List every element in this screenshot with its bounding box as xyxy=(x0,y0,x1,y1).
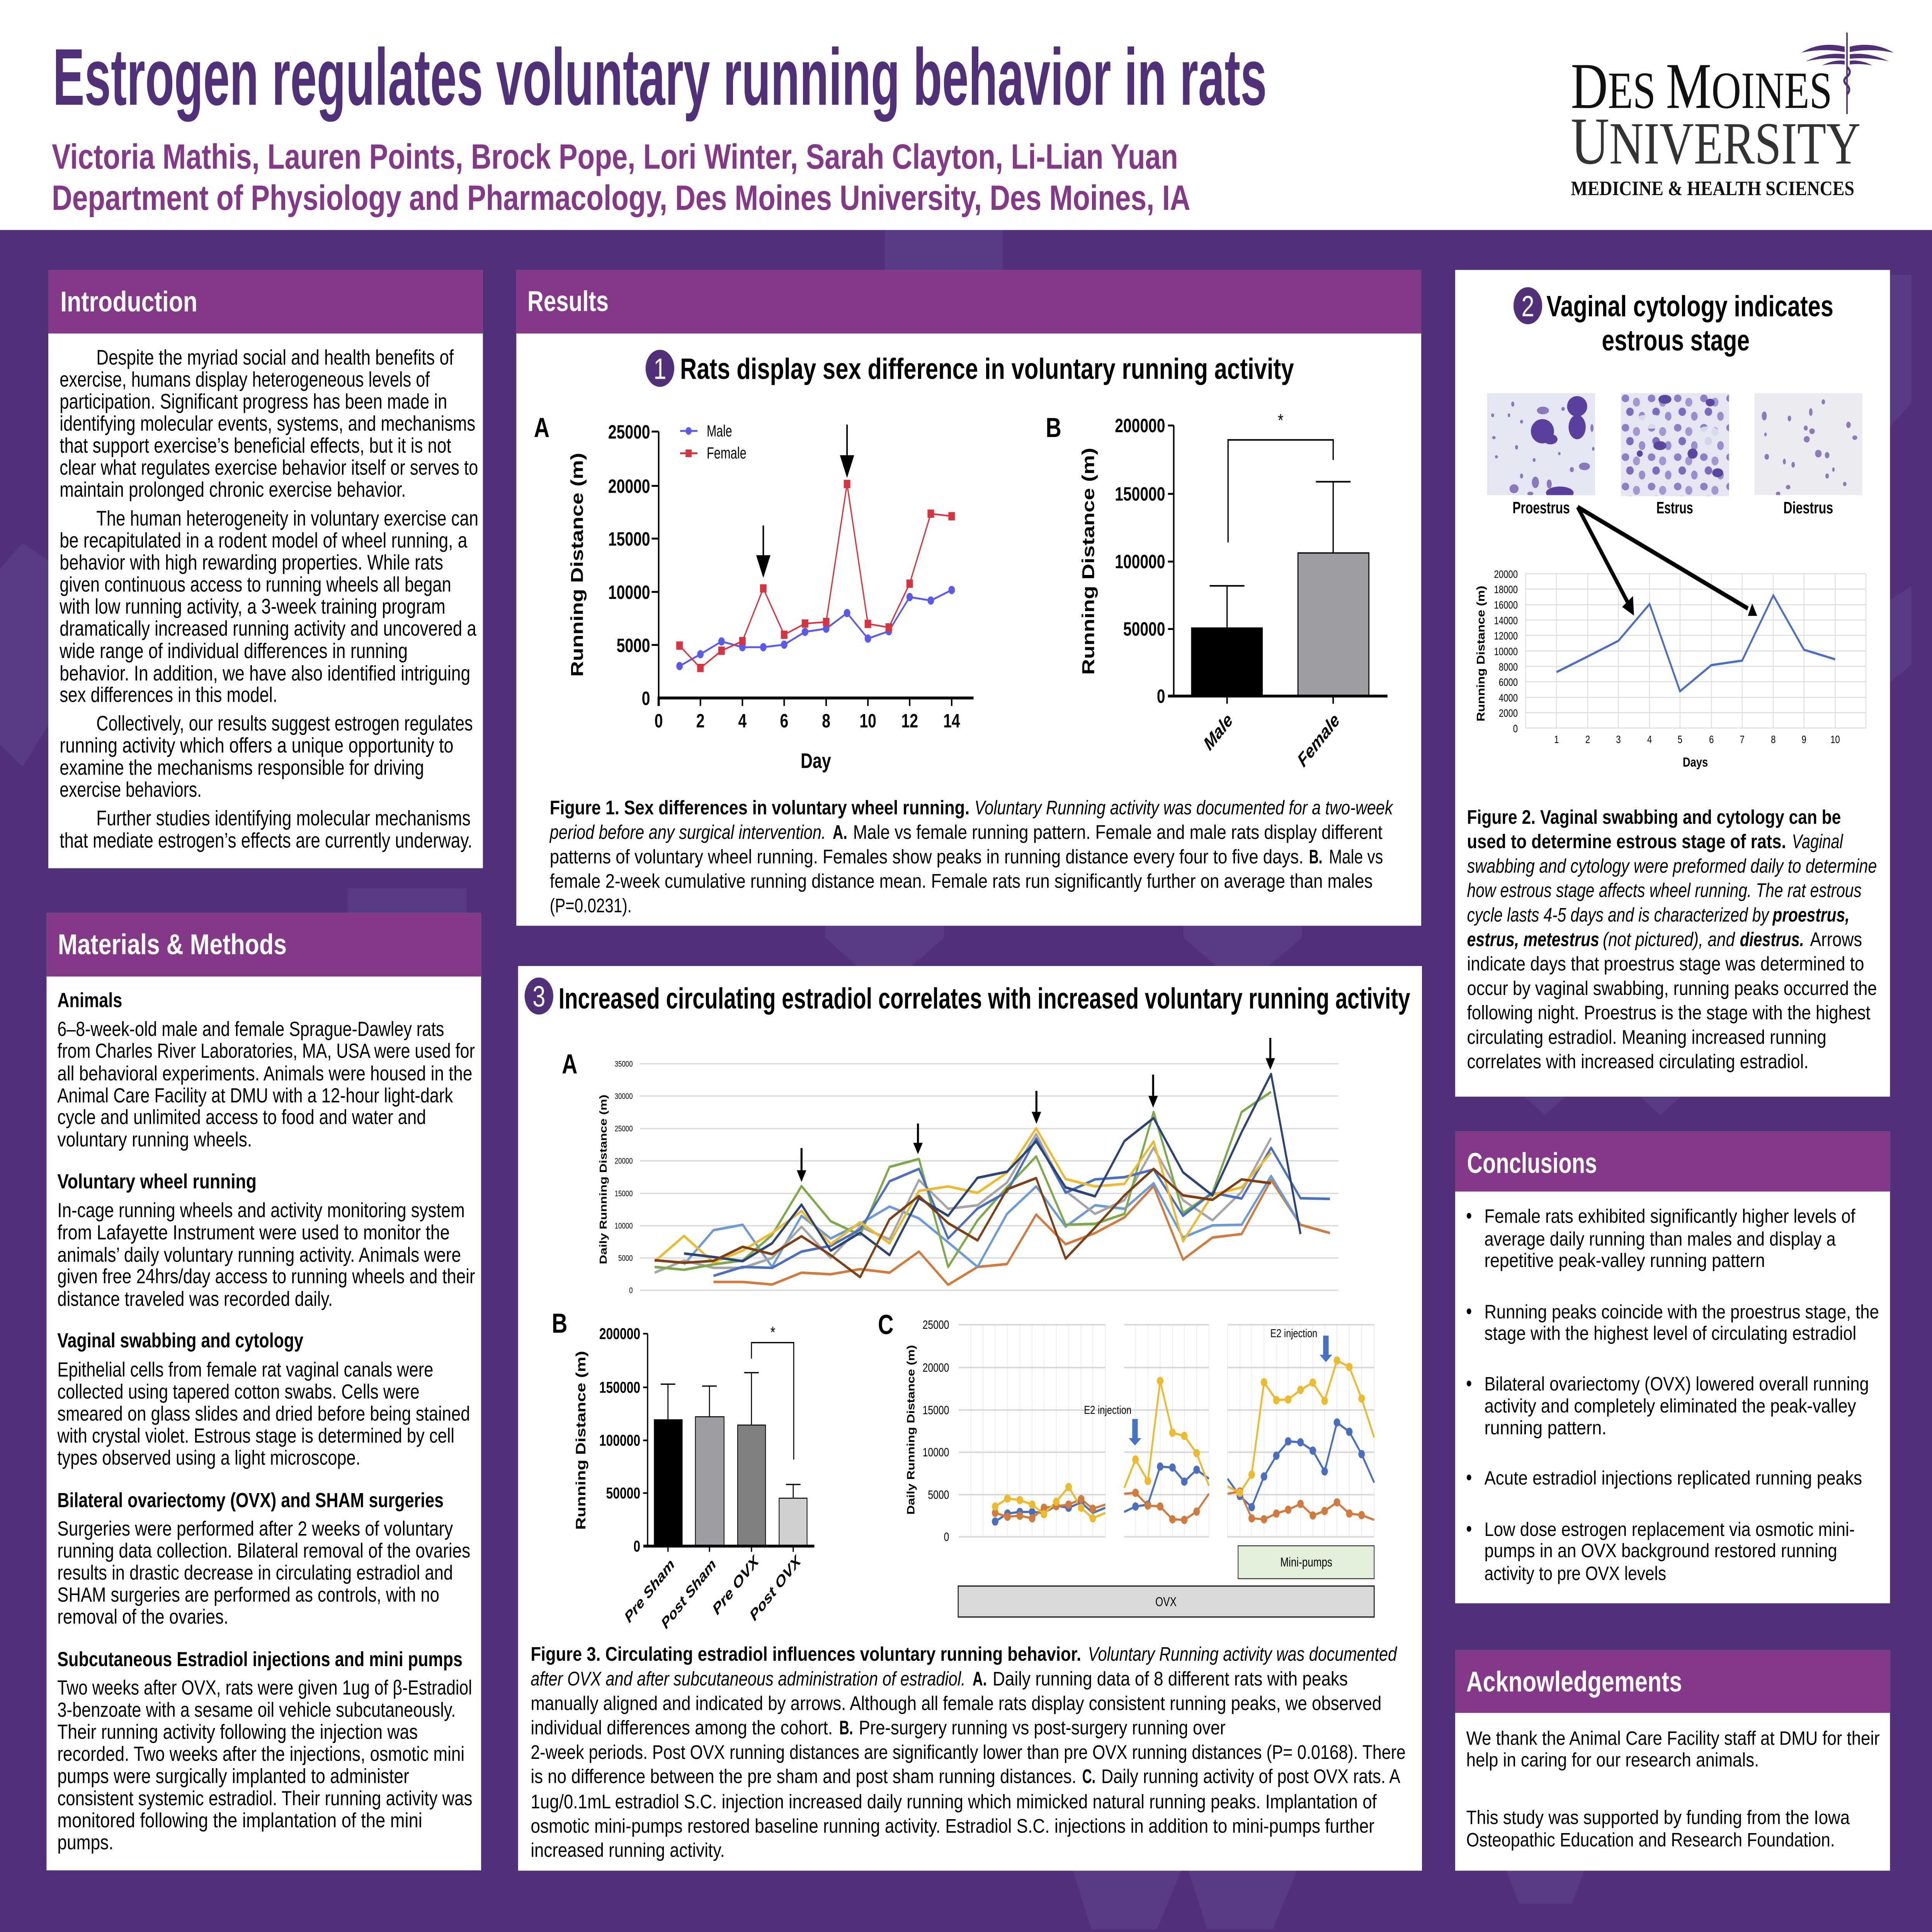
text block: voluntary wheel running: given free 24hrs/day access to running wheels and their xyxy=(57,1265,475,1288)
text block: funding xyxy=(1466,1807,1850,1851)
bar chart: figure 3B: Pre Sham xyxy=(622,1556,677,1626)
text block: introduction: given continuous access to running wheels all began xyxy=(60,573,451,596)
caption: figure 3: Voluntary Running activity was documented xyxy=(1088,1643,1397,1665)
header band xyxy=(0,0,1932,230)
text block: introduction xyxy=(59,346,478,852)
arrow: first E2 injection: E2 injection xyxy=(1084,1403,1131,1417)
bullet: sex difference: average daily running than males and display a xyxy=(1484,1229,1836,1250)
line chart: figure 3A: A xyxy=(562,1048,577,1079)
panel: finding 3 xyxy=(518,966,1422,1871)
text block: introduction: that support exercise’s beneficial effects, but it is not xyxy=(60,434,451,457)
line chart: figure 2: 8 xyxy=(1771,734,1776,746)
arrows: aligned peaks xyxy=(797,1038,1275,1182)
bullet: ovariectomy: Bilateral ovariectomy (OVX) lowered overall running xyxy=(1484,1374,1869,1395)
caption: figure 1: female 2-week cumulative running distance mean. Female rats run significantly further on average than males xyxy=(550,870,1372,892)
heading: finding 3: 3 xyxy=(532,980,545,1013)
line chart: figure 2: 5 xyxy=(1678,734,1682,746)
line chart: figure 1A: 4 xyxy=(738,711,747,732)
bar chart: figure 3B: * xyxy=(770,1323,775,1341)
caption: figure 2: Vaginal xyxy=(1792,830,1844,852)
line chart: figure 3A: 0 xyxy=(629,1286,633,1295)
text block: introduction: behavior with high rewarding properties. While rats xyxy=(60,551,443,574)
bar chart: figure 3B: 200000 xyxy=(599,1325,640,1342)
micrograph: diestrus xyxy=(1754,393,1862,495)
caption: figure 3: increased running activity. xyxy=(531,1839,725,1861)
text block: introduction: Collectively, our results suggest estrogen regulates xyxy=(96,712,473,735)
bullet: sex difference xyxy=(1467,1206,1855,1271)
line chart: figure 1A: 10000 xyxy=(608,582,650,603)
line chart: figure 1A: Day xyxy=(801,750,831,773)
text block: estradiol injections and mini pumps: Two weeks after OVX, rats were given 1ug of β-Estradiol xyxy=(57,1677,472,1699)
bar chart: figure 3B: Post Sham xyxy=(658,1556,719,1632)
caption: figure 3: is no difference between the pre sham and post sham running distances. xyxy=(531,1765,1077,1787)
line chart: figure 3C xyxy=(878,1309,1374,1617)
bar chart: figure 1B: Running Distance (m) xyxy=(1078,448,1098,675)
arrow: first E2 injection xyxy=(1084,1403,1141,1446)
caption: figure 3: 1ug/0.1mL estradiol S.C. injection increased daily running which mimicked natural running peaks. Implantation of xyxy=(531,1790,1377,1813)
line chart: figure 2: 14000 xyxy=(1494,615,1518,627)
caption: figure 1: B. xyxy=(1309,845,1322,868)
line chart: figure 1A: 10 xyxy=(859,711,876,732)
bar chart: figure 3B: 150000 xyxy=(599,1379,640,1396)
arrow: proestrus to second peak xyxy=(1578,507,1757,616)
line chart: figure 2: 12000 xyxy=(1494,630,1518,642)
caption: figure 2: diestrus. xyxy=(1740,928,1804,951)
line chart: figure 1A: 5000 xyxy=(617,635,650,656)
caption: figure 3: individual differences among the cohort. xyxy=(531,1716,833,1738)
bar chart: figure 1B: * xyxy=(1278,410,1283,430)
text block: funding: Osteopathic Education and Research Foundation. xyxy=(1466,1830,1835,1851)
text block: vaginal swabbing and cytology: smeared on glass slides and dried before being stained xyxy=(57,1403,470,1425)
line chart: figure 3A: 30000 xyxy=(615,1092,633,1101)
line chart: figure 2: Days xyxy=(1683,755,1708,770)
line chart: figure 2: 9 xyxy=(1802,734,1806,746)
line chart: figure 2: 18000 xyxy=(1494,584,1518,596)
line chart: figure 2: 10 xyxy=(1830,734,1840,746)
heading: finding 1: Rats display sex difference in voluntary running activity xyxy=(680,352,1294,385)
caption: figure 3: Daily running data of 8 different rats with peaks xyxy=(993,1667,1348,1690)
text block: estradiol injections and mini pumps: 3-benzoate with a sesame oil vehicle subcutaneously. xyxy=(57,1699,456,1721)
micrograph: estrus xyxy=(1621,393,1729,496)
caption: figure 1: Voluntary Running activity was documented for a two-week xyxy=(975,796,1393,818)
line chart: figure 2: 3 xyxy=(1616,734,1621,746)
text block: thanks: We thank the Animal Care Facility staff at DMU for their xyxy=(1466,1728,1880,1749)
text block: introduction: Despite the myriad social and health benefits of xyxy=(96,346,454,369)
text block: estradiol injections and mini pumps: Subcutaneous Estradiol injections and mini pumps xyxy=(57,1648,463,1671)
line chart: figure 3C: 15000 xyxy=(923,1403,949,1417)
text block: introduction: sex differences in this model. xyxy=(60,684,277,707)
panel: results xyxy=(516,270,1421,926)
bullet: ovariectomy: activity and completely eliminated the peak-valley xyxy=(1484,1396,1856,1417)
panel: introduction xyxy=(48,270,483,868)
label: OVX xyxy=(958,1586,1374,1617)
text block: OVX and SHAM surgeries: removal of the ovaries. xyxy=(57,1606,228,1628)
line chart: figure 1A: 0 xyxy=(642,688,650,709)
text block: funding: This study was supported by funding from the Iowa xyxy=(1466,1807,1850,1828)
line chart: figure 1A: 15000 xyxy=(608,529,650,550)
bar chart: figure 1B: 200000 xyxy=(1115,415,1165,437)
caption: figure 1: Male vs xyxy=(1329,845,1383,868)
caption: figure 2: Arrows xyxy=(1810,928,1862,951)
heading: finding 1: 1 xyxy=(653,352,667,385)
caption: figure 2: how estrous stage affects wheel running. The rat estrous xyxy=(1467,879,1862,901)
line chart: figure 2: 2 xyxy=(1585,734,1590,746)
line chart: figure 3A: 35000 xyxy=(615,1060,633,1069)
caption: figure 3: B. xyxy=(839,1716,853,1738)
line chart: figure 3C: 5000 xyxy=(928,1488,949,1502)
heading: finding 2: Vaginal cytology indicates xyxy=(1546,290,1833,323)
caption: figure 3: A. xyxy=(973,1667,987,1690)
bullet: estrogen replacement: activity to pre OVX levels xyxy=(1484,1563,1666,1584)
bullet: ovariectomy xyxy=(1467,1374,1869,1439)
caption: figure 3: Figure 3. Circulating estradiol influences voluntary running behavior. xyxy=(531,1643,1081,1665)
text block: introduction: Further studies identifying molecular mechanisms xyxy=(96,807,471,830)
text block: estradiol injections and mini pumps xyxy=(57,1648,472,1854)
text block: thanks xyxy=(1466,1728,1880,1771)
text block: introduction: exercise behaviors. xyxy=(60,778,202,801)
heading: conclusions: Conclusions xyxy=(1467,1147,1597,1179)
heading: finding 2: 2 xyxy=(1521,290,1534,323)
line chart: figure 3C: 0 xyxy=(944,1530,949,1544)
line chart: figure 3A: 10000 xyxy=(615,1221,633,1231)
caption: figure 1: A. xyxy=(833,821,847,843)
heading: introduction: Introduction xyxy=(60,286,197,318)
line chart: figure 2: 0 xyxy=(1513,723,1518,735)
line chart: figure 1A: 6 xyxy=(780,711,788,732)
bar chart: figure 1B: 0 xyxy=(1157,686,1165,707)
line chart: figure 2: 7 xyxy=(1740,734,1745,746)
caption: figure 3: C. xyxy=(1082,1765,1095,1787)
line chart: figure 1A: 2 xyxy=(696,711,705,732)
line chart: figure 3C: 20000 xyxy=(923,1361,949,1374)
line chart: figure 2: 6000 xyxy=(1499,677,1518,689)
bar chart: figure 1B xyxy=(1046,410,1388,771)
heading: materials and methods: Materials & Methods xyxy=(58,929,287,961)
bar chart: figure 3B: 50000 xyxy=(606,1484,640,1502)
icon: caduceus xyxy=(1801,32,1894,114)
caption: figure 3: Daily running activity of post OVX rats. A xyxy=(1101,1765,1400,1787)
text block: introduction: examine the mechanisms responsible for driving xyxy=(60,756,424,779)
line chart: figure 2: 16000 xyxy=(1494,599,1518,611)
line chart: figure 2: 4 xyxy=(1647,734,1652,746)
text block: introduction: exercise, humans display heterogeneous levels of xyxy=(60,368,430,391)
affiliation: Department of Physiology and Pharmacology, Des Moines University, Des Moines, IA xyxy=(52,179,1190,218)
line chart: figure 2: 20000 xyxy=(1494,568,1518,580)
text block: introduction: maintain prolonged chronic exercise behavior. xyxy=(60,478,406,502)
line chart: figure 2: 6 xyxy=(1709,734,1714,746)
text block: animals: from Charles River Laboratories, MA, USA were used for xyxy=(57,1040,475,1062)
text block: vaginal swabbing and cytology: Vaginal swabbing and cytology xyxy=(57,1329,303,1352)
bullet: sex difference: Female rats exhibited significantly higher levels of xyxy=(1484,1206,1855,1227)
caption: figure 1: Male vs female running pattern. Female and male rats display different xyxy=(853,821,1383,843)
panel: acknowledgements xyxy=(1455,1650,1890,1871)
legend: Female xyxy=(707,444,747,462)
heading: finding 3: Increased circulating estradiol correlates with increased voluntary running activity xyxy=(559,982,1410,1015)
text block: animals: all behavioral experiments. Animals were housed in the xyxy=(57,1062,472,1085)
text block: estradiol injections and mini pumps: Their running activity following the injection was xyxy=(57,1721,418,1743)
bar chart: figure 1B: B xyxy=(1046,412,1061,443)
heading: finding 2 xyxy=(1514,287,1833,357)
caption: figure 2: indicate days that proestrus stage was determined to xyxy=(1467,952,1864,975)
text block: vaginal swabbing and cytology: types observed using a light microscope. xyxy=(57,1447,361,1469)
line chart: figure 1A: 12 xyxy=(901,711,918,732)
arrow: second E2 injection: E2 injection xyxy=(1270,1327,1317,1340)
authors: Victoria Mathis, Lauren Points, Brock Pope, Lori Winter, Sarah Clayton, Li-Lian Yuan xyxy=(52,137,1178,177)
legend: Male xyxy=(707,422,732,440)
line chart: figure 1A: 25000 xyxy=(608,422,650,443)
text block: voluntary wheel running: distance traveled was recorded daily. xyxy=(57,1288,333,1311)
text block: estradiol injections and mini pumps: pumps were surgically implanted to administer xyxy=(57,1765,409,1788)
line chart: figure 2 xyxy=(1475,568,1866,770)
caption: figure 3: after OVX and after subcutaneous administration of estradiol. xyxy=(531,1667,966,1690)
text block: voluntary wheel running: from Lafayette Instrument were used to monitor the xyxy=(57,1221,450,1244)
bar chart: figure 3B: 100000 xyxy=(599,1432,640,1449)
line chart: figure 3A: 25000 xyxy=(615,1124,633,1134)
title: Estrogen regulates voluntary running behavior in rats xyxy=(53,32,1267,122)
line chart: figure 3A: 15000 xyxy=(615,1189,633,1199)
line chart: figure 2: 10000 xyxy=(1494,646,1518,658)
text block: voluntary wheel running: In-cage running wheels and activity monitoring system xyxy=(57,1199,465,1222)
text block: animals: Animal Care Facility at DMU with a 12-hour light-dark xyxy=(57,1084,453,1107)
bullet: sex difference: repetitive peak-valley running pattern xyxy=(1484,1250,1765,1271)
text block: introduction: clear what regulates exercise behavior itself or serves to xyxy=(60,456,478,480)
text block: estradiol injections and mini pumps: consistent systemic estradiol. Their running activity was xyxy=(57,1787,472,1810)
legend xyxy=(680,422,747,462)
line chart: figure 1A xyxy=(534,412,974,773)
heading: finding 2: estrous stage xyxy=(1602,324,1750,357)
text block: OVX and SHAM surgeries xyxy=(57,1489,470,1628)
line chart: figure 2: 2000 xyxy=(1499,707,1518,719)
logo: Des Moines University: DES MOINES xyxy=(1571,49,1832,122)
bullet: ovariectomy: running pattern. xyxy=(1484,1418,1607,1439)
bar chart: figure 3B: Post OVX xyxy=(747,1551,804,1624)
text block: animals: Animals xyxy=(57,989,122,1012)
line chart: figure 3C: Daily Running Distance (m) xyxy=(905,1345,917,1515)
caption: figure 3 xyxy=(531,1643,1406,1861)
text block: animals: 6–8-week-old male and female Sprague-Dawley rats xyxy=(57,1018,444,1041)
caption: figure 3: manually aligned and indicated by arrows. Although all female rats display consistent running peaks, we observed xyxy=(531,1692,1381,1714)
text block: vaginal swabbing and cytology xyxy=(57,1329,470,1469)
caption: figure 1: patterns of voluntary wheel running. Females show peaks in running distance every four to five days. xyxy=(550,845,1303,868)
line chart: figure 1A: 20000 xyxy=(608,476,650,497)
bullet: acute injections: Acute estradiol injections replicated running peaks xyxy=(1484,1468,1862,1489)
bar chart: figure 1B: Female xyxy=(1294,709,1343,771)
bar chart: figure 3B: B xyxy=(552,1308,567,1339)
text block: estradiol injections and mini pumps: recorded. Two weeks after the injections, osmotic mini xyxy=(57,1743,464,1765)
logo: Des Moines University: UNIVERSITY xyxy=(1571,104,1861,178)
caption: figure 1 xyxy=(549,796,1393,917)
caption: figure 2: estrus, metestrus xyxy=(1467,928,1599,951)
line chart: figure 1A: 0 xyxy=(655,711,663,732)
arrow: proestrus to first peak xyxy=(1578,507,1634,616)
line chart: figure 3A xyxy=(562,1038,1338,1295)
bullet: estrogen replacement xyxy=(1467,1519,1855,1584)
caption: figure 2: circulating estradiol. Meaning increased running xyxy=(1467,1026,1827,1048)
text block: OVX and SHAM surgeries: SHAM surgeries are performed as controls, with no xyxy=(57,1584,439,1606)
text block: vaginal swabbing and cytology: Epithelial cells from female rat vaginal canals were xyxy=(57,1359,433,1381)
line chart: figure 3C: 25000 xyxy=(923,1318,949,1332)
caption: figure 2: (not pictured), and xyxy=(1603,928,1735,951)
text block: introduction: participation. Significant progress has been made in xyxy=(60,390,447,413)
line chart: figure 1A: Running Distance (m) xyxy=(567,453,587,677)
logo: Des Moines University xyxy=(1571,32,1894,200)
caption: figure 1: period before any surgical intervention. xyxy=(549,821,826,843)
caption: figure 2: Figure 2. Vaginal swabbing and cytology can be xyxy=(1467,806,1841,828)
text block: voluntary wheel running: animals’ daily voluntary running activity. Animals were xyxy=(57,1244,461,1267)
panel: materials and methods xyxy=(46,913,481,1870)
labels: cycle stages: Estrus xyxy=(1656,499,1693,517)
caption: figure 2: swabbing and cytology were preformed daily to determine xyxy=(1467,855,1877,877)
line chart: figure 2: 4000 xyxy=(1499,692,1518,704)
caption: figure 2: proestrus, xyxy=(1772,903,1850,926)
text block: introduction: The human heterogeneity in voluntary exercise can xyxy=(96,507,478,530)
labels: cycle stages: Proestrus xyxy=(1512,499,1570,517)
labels: cycle stages: Diestrus xyxy=(1783,499,1833,517)
text block: introduction: behavior. In addition, we have also identified intriguing xyxy=(60,662,470,685)
line chart: figure 3C: 10000 xyxy=(923,1445,949,1459)
labels: cycle stages xyxy=(1512,499,1833,517)
text block: OVX and SHAM surgeries: results in drastic decrease in circulating estradiol and xyxy=(57,1561,453,1584)
text block: OVX and SHAM surgeries: Bilateral ovariectomy (OVX) and SHAM surgeries xyxy=(57,1489,444,1512)
bar chart: figure 3B: Running Distance (m) xyxy=(573,1351,588,1530)
text block: introduction: identifying molecular events, systems, and mechanisms xyxy=(60,412,475,435)
caption: figure 2: occur by vaginal swabbing, running peaks occurred the xyxy=(1467,977,1877,999)
bullet: proestrus peaks: stage with the highest level of circulating estradiol xyxy=(1484,1323,1856,1344)
text block: introduction: be recapitulated in a rodent model of wheel running, a xyxy=(60,529,468,552)
bullet: estrogen replacement: Low dose estrogen replacement via osmotic mini- xyxy=(1484,1519,1855,1540)
text block: introduction: that mediate estrogen’s effects are currently underway. xyxy=(60,829,472,852)
caption: figure 2: cycle lasts 4-5 days and is characterized by xyxy=(1467,903,1770,926)
bullet: proestrus peaks xyxy=(1467,1302,1879,1344)
text block: estradiol injections and mini pumps: pumps. xyxy=(57,1831,114,1854)
arrow: day 9 peak xyxy=(841,425,853,475)
line chart: figure 3A: 20000 xyxy=(615,1156,633,1166)
caption: figure 3: 2-week periods. Post OVX running distances are significantly lower than pre OVX running distances (P= 0.0168). There xyxy=(531,1741,1406,1763)
text block: OVX and SHAM surgeries: Surgeries were performed after 2 weeks of voluntary xyxy=(57,1517,453,1540)
text block: animals: cycle and unlimited access to food and water and xyxy=(57,1106,426,1129)
text block: introduction: with low running activity, a 3-week training program xyxy=(59,595,446,618)
line chart: figure 3C: C xyxy=(878,1309,894,1340)
label: mini-pumps xyxy=(1238,1546,1374,1579)
caption: figure 2: following night. Proestrus is the stage with the highest xyxy=(1467,1001,1871,1024)
bar chart: figure 3B: Pre OVX xyxy=(710,1551,762,1618)
micrograph: proestrus xyxy=(1487,393,1595,499)
line chart: figure 1A: 8 xyxy=(822,711,830,732)
bullet: proestrus peaks: Running peaks coincide with the proestrus stage, the xyxy=(1484,1302,1879,1323)
caption: figure 1: Figure 1. Sex differences in voluntary wheel running. xyxy=(550,796,969,818)
heading: results: Results xyxy=(527,286,609,318)
text block: introduction: running activity which offers a unique opportunity to xyxy=(60,734,454,757)
text block: vaginal swabbing and cytology: with crystal violet. Estrous stage is determined by cell xyxy=(57,1425,454,1447)
label: mini-pumps: Mini-pumps xyxy=(1280,1555,1332,1570)
bar chart: figure 1B: 100000 xyxy=(1115,551,1165,573)
line chart: figure 1A: 14 xyxy=(943,711,960,732)
bar chart: figure 1B: 50000 xyxy=(1123,619,1165,640)
text block: introduction: dramatically increased running activity and uncovered a xyxy=(60,617,476,640)
text block: introduction: wide range of individual differences in running xyxy=(59,639,408,663)
caption: figure 2: correlates with increased circulating estradiol. xyxy=(1467,1050,1808,1073)
bar chart: figure 1B: Male xyxy=(1201,709,1236,755)
caption: figure 3: osmotic mini-pumps restored baseline running activity. Estradiol S.C. injections in addition to mini-pumps further xyxy=(531,1815,1374,1837)
line chart: figure 3A: Daily Running Distance (m) xyxy=(598,1095,609,1264)
panel: finding 2 xyxy=(1455,270,1890,1097)
bar chart: figure 3B xyxy=(552,1308,815,1632)
caption: figure 1: (P=0.0231). xyxy=(550,894,632,917)
line chart: figure 2: 8000 xyxy=(1499,661,1518,673)
line chart: figure 3A: 5000 xyxy=(618,1253,633,1263)
bar chart: figure 3B: 0 xyxy=(633,1537,640,1555)
label: OVX: OVX xyxy=(1155,1595,1177,1609)
text block: animals: voluntary running wheels. xyxy=(57,1128,252,1151)
text block: vaginal swabbing and cytology: collected using tapered cotton swabs. Cells were xyxy=(57,1381,420,1403)
caption: figure 2: used to determine estrous stage of rats. xyxy=(1467,830,1786,852)
text block: thanks: help in caring for our research animals. xyxy=(1466,1750,1759,1771)
text block: animals xyxy=(57,989,475,1151)
arrow: day 5 peak xyxy=(757,526,769,575)
text block: voluntary wheel running: Voluntary wheel running xyxy=(57,1170,257,1193)
bar chart: figure 1B: 150000 xyxy=(1115,484,1165,505)
text block: voluntary wheel running xyxy=(57,1170,475,1311)
heading: acknowledgements: Acknowledgements xyxy=(1466,1666,1682,1698)
arrow: second E2 injection xyxy=(1270,1327,1332,1362)
caption: figure 2 xyxy=(1467,806,1877,1073)
line chart: figure 2: 1 xyxy=(1554,734,1559,746)
bullet: estrogen replacement: pumps in an OVX background restored running xyxy=(1484,1541,1837,1561)
caption: figure 3: Pre-surgery running vs post-surgery running over xyxy=(859,1716,1226,1738)
text block: OVX and SHAM surgeries: running data collection. Bilateral removal of the ovaries xyxy=(57,1539,470,1562)
line chart: figure 1A: A xyxy=(534,412,549,443)
line chart: figure 2: Running Distance (m) xyxy=(1475,586,1487,721)
text block: estradiol injections and mini pumps: monitored following the implantation of the mini xyxy=(57,1809,422,1832)
logo: Des Moines University: MEDICINE & HEALTH SCIENCES xyxy=(1571,178,1854,200)
panel: conclusions xyxy=(1455,1131,1890,1603)
